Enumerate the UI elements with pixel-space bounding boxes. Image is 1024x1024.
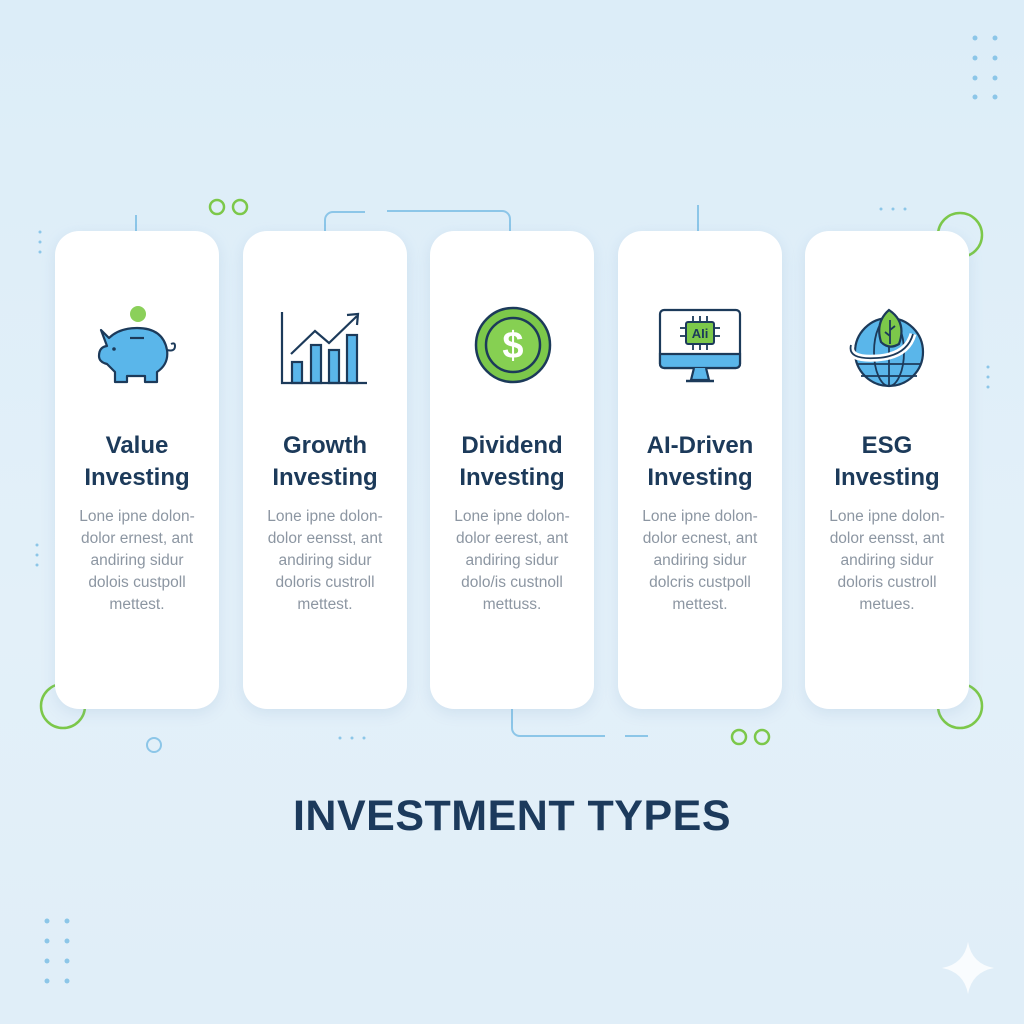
body text: dolo/is custnoll bbox=[461, 574, 563, 591]
heading: Investing bbox=[272, 464, 378, 491]
body text bbox=[642, 508, 758, 613]
body text bbox=[829, 508, 945, 613]
body text: Lone ipne dolon- bbox=[829, 508, 945, 525]
body text: andiring sidur bbox=[840, 552, 934, 569]
body text: Lone ipne dolon- bbox=[454, 508, 570, 525]
body text: dolor ecnest, ant bbox=[643, 530, 757, 547]
body text: Lone ipne dolon- bbox=[267, 508, 383, 525]
heading bbox=[459, 432, 565, 491]
heading: Growth bbox=[283, 432, 367, 459]
card: value investing bbox=[55, 231, 219, 709]
body text bbox=[267, 508, 383, 613]
heading: Investing bbox=[459, 464, 565, 491]
heading: Investing bbox=[834, 464, 940, 491]
icon: dollar coin bbox=[474, 306, 552, 384]
body text: doloris custroll bbox=[837, 574, 937, 591]
body text: mettest. bbox=[109, 596, 165, 613]
icon: dollar coin: $ bbox=[502, 325, 524, 367]
body text bbox=[79, 508, 195, 613]
heading: ESG bbox=[862, 432, 912, 459]
title: INVESTMENT TYPES bbox=[293, 792, 731, 840]
icon: monitor with AI chip bbox=[658, 308, 742, 382]
heading bbox=[84, 432, 190, 491]
body text: dolor eensst, ant bbox=[830, 530, 944, 547]
heading: Dividend bbox=[461, 432, 563, 459]
heading: Investing bbox=[647, 464, 753, 491]
body text: dolcris custpoll bbox=[649, 574, 751, 591]
card: AI-driven investing bbox=[618, 231, 782, 709]
heading bbox=[272, 432, 378, 491]
body text: Lone ipne dolon- bbox=[79, 508, 195, 525]
body text: andiring sidur bbox=[278, 552, 372, 569]
heading: AI-Driven bbox=[647, 432, 753, 459]
card: dividend investing bbox=[430, 231, 594, 709]
heading: Value bbox=[106, 432, 168, 459]
body text bbox=[454, 508, 570, 613]
heading bbox=[647, 432, 753, 491]
body text: mettest. bbox=[297, 596, 353, 613]
body text: andiring sidur bbox=[90, 552, 184, 569]
icon: piggy bank bbox=[98, 306, 176, 384]
card: growth investing bbox=[243, 231, 407, 709]
body text: dolois custpoll bbox=[88, 574, 186, 591]
body text: mettest. bbox=[672, 596, 728, 613]
heading bbox=[834, 432, 940, 491]
body text: metues. bbox=[859, 596, 915, 613]
icon: bar chart with arrow bbox=[280, 312, 367, 384]
icon: globe with leaf bbox=[850, 308, 924, 388]
heading: Investing bbox=[84, 464, 190, 491]
body text: mettuss. bbox=[483, 596, 541, 613]
body text: Lone ipne dolon- bbox=[642, 508, 758, 525]
body text: dolor ernest, ant bbox=[81, 530, 193, 547]
body text: dolor eensst, ant bbox=[268, 530, 382, 547]
body text: dolor eerest, ant bbox=[456, 530, 568, 547]
body text: andiring sidur bbox=[653, 552, 747, 569]
body text: andiring sidur bbox=[465, 552, 559, 569]
icon: monitor with AI chip: AIi bbox=[692, 326, 708, 341]
card: ESG investing bbox=[805, 231, 969, 709]
body text: doloris custroll bbox=[275, 574, 375, 591]
